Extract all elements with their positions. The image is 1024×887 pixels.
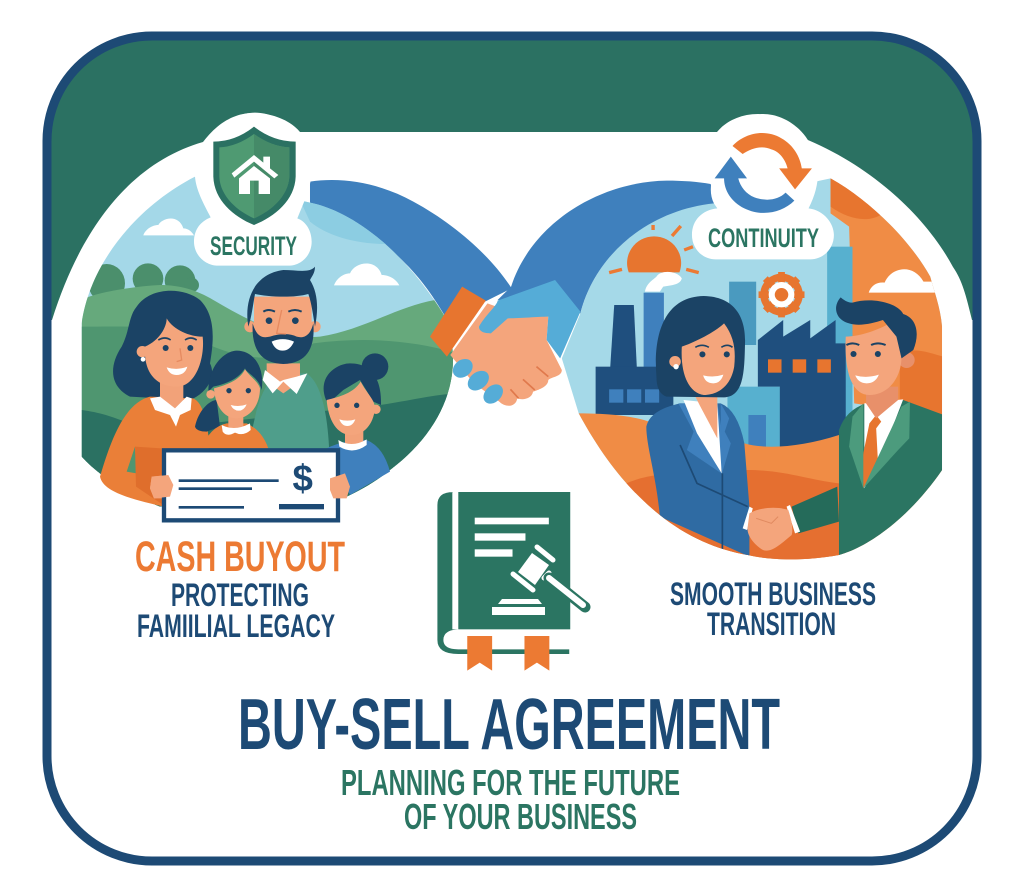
check with dollar sign [150, 450, 350, 520]
icon: law book with gavel [437, 492, 585, 671]
subtitle: PLANNING FOR THE FUTURE [341, 762, 680, 803]
text: smooth business transition [670, 576, 876, 642]
girl with ponytail [195, 351, 268, 448]
child with bun [324, 353, 390, 495]
subtitle [341, 762, 680, 837]
orange ground [575, 410, 944, 567]
heading: cash buyout: CASH BUYOUT [135, 533, 345, 581]
large handshake [430, 280, 580, 407]
blue arc behind business scene [498, 181, 721, 313]
subtitle: OF YOUR BUSINESS [404, 796, 637, 837]
clouds [143, 219, 194, 235]
gear icon [759, 272, 805, 317]
text: protecting familial legacy: PROTECTING [171, 577, 309, 613]
label: continuity: CONTINUITY [708, 223, 819, 253]
factories [644, 293, 664, 373]
text: protecting familial legacy: FAMIILIAL LEGACY [137, 608, 335, 644]
mother [100, 291, 213, 507]
check with dollar sign: $ [292, 458, 313, 499]
continuity badge backing [692, 114, 834, 259]
panel: business continuity scene [430, 114, 947, 567]
sun and rays [627, 236, 681, 272]
businesswoman [646, 296, 749, 557]
text: protecting familial legacy [137, 577, 335, 644]
businessman [792, 297, 944, 557]
green header band [40, 30, 985, 320]
father [244, 267, 329, 453]
cityscape [558, 173, 947, 567]
small clasped hands [743, 505, 800, 551]
text: smooth business transition: SMOOTH BUSINESS [670, 576, 876, 612]
blue arc behind family scene [310, 180, 512, 323]
landscape [80, 173, 480, 510]
panel: family security scene [80, 113, 512, 520]
icon: shield with house [213, 127, 296, 225]
label: security: SECURITY [210, 231, 297, 261]
text: smooth business transition: TRANSITION [707, 606, 836, 642]
security badge backing [194, 113, 312, 266]
icon: cycle arrows [715, 133, 812, 213]
